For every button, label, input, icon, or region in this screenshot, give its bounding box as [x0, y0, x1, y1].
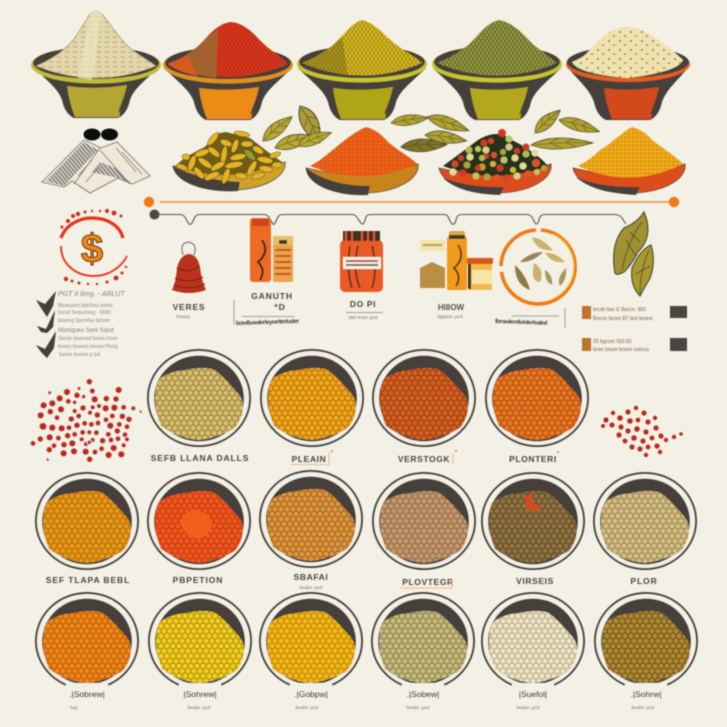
- icon: large olive leaves: [614, 212, 653, 296]
- dish: cream seeds: beabe ;pcd: [517, 705, 540, 710]
- leaves: around third plate: [390, 105, 601, 153]
- dish: brown seeds: PLOVTEGR: [402, 577, 454, 587]
- dish: ochre seeds: SBAFAI: [294, 572, 328, 582]
- dish: ochre seeds: [260, 471, 362, 590]
- item: orange jars: bowlbowlerleywriterluder: [236, 319, 300, 327]
- item: spice jar: 880 Irves ;pcd: [349, 315, 378, 320]
- dish: cream seeds: [482, 593, 584, 710]
- item: red bell: [172, 242, 206, 319]
- item: box, bottle and jar: bgpace ;pcd: [437, 314, 463, 319]
- dish: golden seeds: beabe ;pcd: [296, 705, 319, 710]
- panel: spice dishes row 2: [36, 471, 696, 590]
- item: red bell: Sweep: [176, 314, 190, 319]
- icon: leaves in orange ring: [495, 230, 575, 328]
- text block: left notes: Seeds beamed bales more: [58, 336, 118, 342]
- bowl: cream spice: [566, 27, 690, 120]
- dish: amber seeds: [261, 350, 363, 464]
- item: orange jars: [234, 218, 300, 327]
- dish: cream seeds: |Suefol|: [519, 689, 547, 699]
- text block: left notes: [58, 291, 125, 358]
- dish: dark seeds with red specks: VIRSEIS: [516, 576, 554, 586]
- icon: paper scroll bundle: [42, 128, 150, 193]
- legend: right side: [582, 306, 687, 353]
- bowl: golden seeds: [297, 20, 427, 120]
- dish: sand seeds: PLOR: [630, 576, 658, 586]
- panel: plates of spices with leaves: [173, 102, 685, 195]
- dish: bronze seeds: [595, 593, 697, 710]
- dish: bright yellow seeds: |Sohrew|: [183, 689, 217, 699]
- dish: bright yellow seeds: [149, 593, 251, 710]
- text block: left notes: PGT II 6mg. - ARLUT: [58, 291, 125, 298]
- dish: red-orange powder: PBPETION: [173, 575, 223, 585]
- peppercorn cluster: left: [30, 378, 142, 463]
- timeline: orange line: [144, 197, 679, 207]
- text block: left notes: brews bowers brews Plong: [58, 344, 118, 350]
- dish: pale olive seeds: [372, 593, 474, 710]
- text block: left notes: bowing Spicefue besee: [58, 318, 110, 324]
- item: red bell: VERES: [173, 302, 205, 312]
- plate: orange powder: [306, 127, 418, 195]
- plate: mixed vegetable seeds: [439, 129, 551, 195]
- dish: pale olive seeds: beabe ;pcd: [407, 705, 430, 710]
- dish: orange-red seeds: PLONTERI: [509, 454, 557, 464]
- dish: pale olive seeds: .|Sobew|: [407, 689, 439, 699]
- bowl: red spice: [163, 22, 293, 120]
- dish: orange seeds: [36, 473, 138, 585]
- dish: bronze seeds: beabe ;pcd: [632, 705, 655, 710]
- dish: rust seeds: VERSTOGK: [398, 454, 450, 464]
- dish: golden seeds: [260, 593, 362, 710]
- peppercorn cluster: right: [601, 406, 683, 457]
- timeline: bracket connector: [150, 210, 626, 224]
- bowl: pale grain: [31, 12, 161, 118]
- dish: golden seeds: .|Gobpw|: [294, 689, 328, 699]
- plate: golden powder: [573, 127, 685, 195]
- dish: deep orange seeds: bay: [70, 705, 78, 710]
- dish: bronze seeds: .|Sohrw|: [631, 689, 661, 699]
- item: spice jar: DO PI: [350, 299, 376, 309]
- plate: yellow chips: [173, 130, 285, 191]
- legend: right side: brwo beam bowm outoca: [593, 347, 649, 353]
- text block: left notes: Measures batches notes: [58, 303, 113, 309]
- dish: deep orange seeds: [36, 593, 138, 710]
- dish: ochre seeds: beabe ;pcd: [300, 585, 323, 590]
- item: orange jars: *D: [274, 302, 286, 312]
- dish: dark seeds with red specks: [482, 473, 584, 586]
- dish: amber seeds: PLEAIN: [292, 454, 326, 464]
- panel: top spice bowls: [31, 12, 690, 120]
- bowl: green seeds: [432, 20, 562, 120]
- item: box, bottle and jar: HI8OW: [438, 303, 465, 312]
- text block: left notes: bases bowse p sol: [59, 352, 100, 358]
- legend: right side: 25 bgcom Gt3 60: [593, 339, 632, 345]
- dish: orange seeds: SEF TLAPA BEBL: [46, 575, 130, 585]
- panel: spice dishes row 1: [148, 350, 588, 464]
- icon: dollar emblem: [60, 209, 127, 285]
- legend: right side: Bocoo boom B7 biol beans: [593, 316, 653, 322]
- dish: deep orange seeds: .|Sobrew|: [69, 689, 105, 699]
- dish: bright yellow seeds: beabe ;pcd: [188, 705, 211, 710]
- item: spice jar: [340, 231, 383, 320]
- dish: red-orange powder: [148, 473, 250, 585]
- item: box, bottle and jar: [420, 231, 493, 319]
- dish: brown seeds: [373, 473, 475, 588]
- dish: tan seeds: [148, 350, 250, 463]
- panel: spice dishes row 3: [36, 593, 697, 710]
- legend: right side: brcde bac E Bacco. 860: [593, 307, 646, 313]
- dish: orange-red seeds: [486, 350, 588, 464]
- icon: leaves in orange ring: lbrowlemlvinlerlvalwl: [495, 319, 548, 327]
- dish: sand seeds: [594, 473, 696, 586]
- item: orange jars: GANUTH: [251, 291, 293, 301]
- icon: dollar emblem: $: [81, 227, 103, 271]
- dish: rust seeds: [373, 350, 475, 464]
- text block: left notes: Moniques Sent Sand: [58, 328, 114, 334]
- dish: tan seeds: SEFB LLANA DALLS: [151, 453, 249, 463]
- leaves: around first plate: [259, 102, 333, 154]
- text block: left notes: boost Seasoning · 5690: [58, 310, 111, 316]
- icons: small bats: [36, 291, 56, 358]
